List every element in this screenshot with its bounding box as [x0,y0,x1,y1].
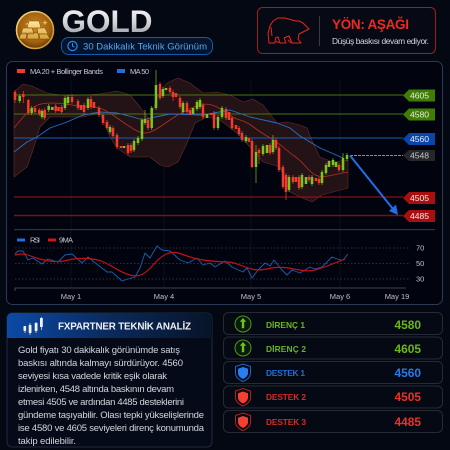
analysis text: izlenirken, 4548 altında baskının devam [18,384,174,395]
price tag: 4505 [403,192,435,204]
icon: candlesticks [24,317,43,335]
price tag: 4605 [403,90,435,102]
price tag: 4485: 4485 [410,211,429,221]
analysis text: Gold fiyatı 30 dakikalık görünümde satış [18,345,180,356]
panel: technical analysis [7,313,212,447]
price tag: 4548 [403,150,435,161]
row: DESTEK 3: DESTEK 3 [266,417,306,427]
RSI axis values: 50 [416,259,424,268]
analysis text: ise 4580 ve 4605 seviyeleri direnç konumunda [18,423,205,434]
RSI axis values: 70 [416,244,424,253]
moving average 50 [14,110,343,158]
analysis text: gündeme taşıyabilir. Olası tepki yükselişlerinde [18,410,204,421]
icon: bear [268,18,309,43]
candlesticks [15,70,347,200]
moving average 20 [14,103,348,176]
row: DESTEK 1: 4560 [394,366,421,380]
row: DESTEK 1: DESTEK 1 [266,368,305,378]
legend: RSI: 9MA [59,236,73,244]
bollinger bands [14,78,348,202]
row: DESTEK 3 [224,410,442,432]
time axis [15,288,409,301]
panel: levels list [224,312,442,432]
RSI axis values [416,244,424,283]
analysis header [7,313,212,338]
RSI indicator [15,236,424,283]
analysis text: seviyesi kısa vadede kritik eşik olarak [18,371,167,382]
legend: price chart: MA 20 + Bollinger Bands [30,67,103,76]
callout text: Düşüş baskısı devam ediyor. [332,36,429,46]
subtitle pill [62,38,212,54]
row: DESTEK 2 [224,386,442,408]
arrow: projected decline [350,156,398,215]
row: DİRENÇ 2: 4605 [394,342,421,356]
time axis: May 5 [241,292,261,301]
analysis text [18,345,205,447]
price tag: 4580: 4580 [410,110,429,120]
row: DESTEK 2: DESTEK 2 [266,392,306,402]
legend: RSI: RSI [30,236,40,244]
callout heading: YÖN: AŞAĞI [332,17,409,32]
panel: chart [6,62,442,304]
level lines [14,95,403,216]
price tag: 4560 [403,133,435,145]
row: DİRENÇ 2: DİRENÇ 2 [266,344,306,354]
price tag: 4548: 4548 [410,151,429,161]
row: DESTEK 2: 4505 [394,390,421,404]
time axis: May 6 [330,292,350,301]
price tag: 4580 [403,108,435,120]
legend: price chart: MA 50 [130,67,149,76]
row: DİRENÇ 1: DİRENÇ 1 [266,320,305,330]
row: DİRENÇ 2 [224,337,442,359]
price tag: 4560: 4560 [410,134,429,144]
price tag: 4485 [403,210,435,222]
RSI line [15,246,348,281]
legend: RSI [17,236,73,244]
time axis: May 1 [61,292,81,301]
row: DESTEK 1 [224,362,442,384]
time axis: May 19 [385,292,409,301]
subtitle pill: 30 Dakikalık Teknik Görünüm [83,41,207,52]
price tag: 4505: 4505 [410,193,429,203]
analysis text: baskısı altında kalmayı sürdürüyor. 4560 [18,358,183,369]
RSI moving average line [15,252,345,276]
direction callout: bearish [258,8,436,54]
analysis text: etmesi 4505 ve ardından 4485 desteklerini [18,397,184,408]
icon: gold coin with bars [16,12,54,48]
time axis: May 4 [154,292,174,301]
RSI axis values: 30 [416,274,424,283]
header: gold logo and title [16,3,212,54]
row: DİRENÇ 1 [224,312,442,334]
price tag: 4605: 4605 [410,91,429,101]
row: DESTEK 3: 4485 [394,415,421,429]
title: GOLD: GOLD [62,3,152,39]
analysis text: takip edilebilir. [18,436,76,447]
row: DİRENÇ 1: 4580 [394,318,421,332]
legend: price chart [17,67,149,76]
analysis heading: FXPARTNER TEKNİK ANALİZ [58,321,191,332]
